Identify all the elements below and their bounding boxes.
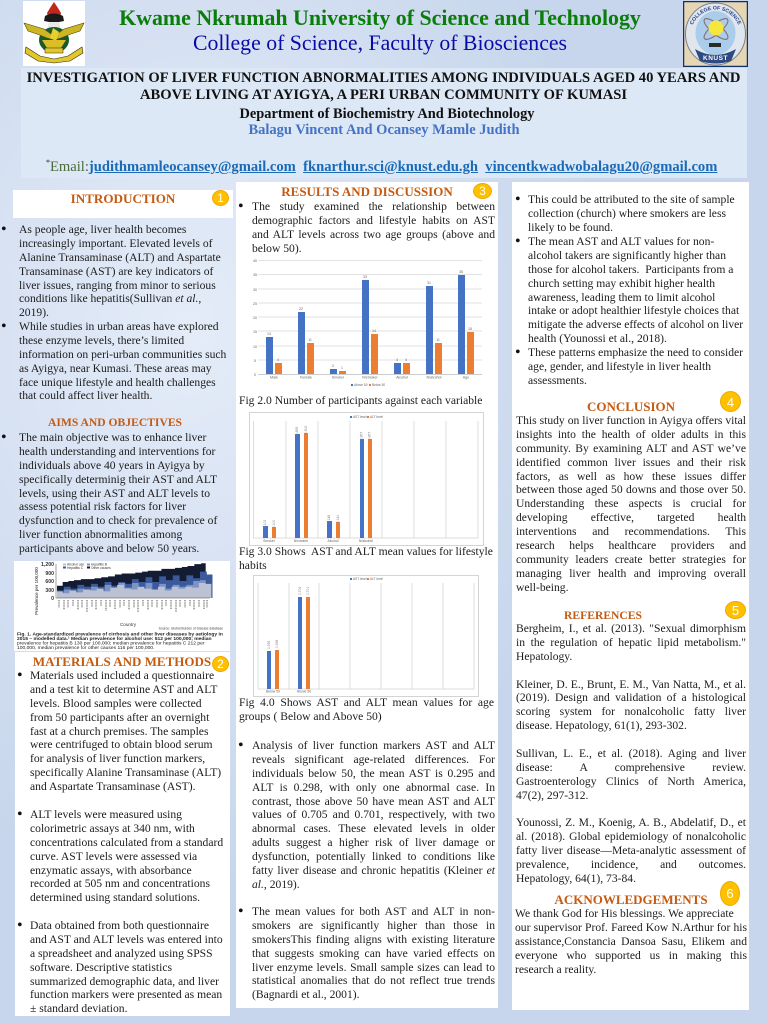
bar chart: participants per variable: Age — [463, 376, 469, 380]
bullets: methods: and a test kit to determine AST and ALT — [30, 683, 217, 696]
references list: 47(2), 297-312. — [516, 789, 588, 802]
bar chart: AST and ALT by age group: ALT level — [370, 577, 383, 581]
bullets: discussion continued: intake or adopt healthier lifestyle choices that — [528, 304, 739, 317]
bar chart: participants per variable: 5 — [254, 359, 256, 363]
bullets: introduction: While studies in urban areas have explored — [19, 320, 219, 333]
bullets: discussion continued: alcohol takers are significantly higher than — [528, 249, 726, 262]
bar chart: participants per variable: 1 — [341, 366, 343, 370]
bullets: discussion continued: awareness, leading them to limit alcohol — [528, 291, 715, 304]
badge 1: 1 — [217, 191, 224, 205]
bullet: analysis of markers — [238, 737, 496, 891]
bullets: discussion continued: The mean AST and ALT values for non- — [528, 235, 714, 248]
bar chart: AST and ALT by lifestyle: AST level — [353, 415, 367, 419]
bar chart: participants per variable: 4 — [405, 358, 407, 362]
references list: disease. Hepatology, 61(1), 293-302. — [516, 719, 687, 732]
bullet: smokers: smokers are significantly higher than those in — [252, 919, 495, 932]
bullet: aims: dysfunction and to check for prevalence of — [19, 514, 217, 527]
bullet: smokers: (Bagnardi et al., 2001). — [252, 988, 360, 1001]
bullets: introduction — [1, 221, 226, 402]
references list: Gastroenterology Clinics of North America, — [516, 775, 746, 788]
bar chart: AST and ALT by lifestyle: ALT level — [370, 415, 383, 419]
bar chart: AST and ALT by age group: 0.701 — [306, 587, 310, 595]
bullets: methods: and AST and ALT levels was entered into — [30, 933, 223, 946]
badge 6: 6 — [726, 886, 734, 901]
conclusion text: insights into the health of older adults in this — [516, 428, 746, 441]
bar chart: AST and ALT by lifestyle: 0.141 — [336, 515, 340, 523]
bullets: discussion continued: • — [515, 344, 521, 361]
bar chart: participants per variable: 20 — [253, 316, 257, 320]
bullet: aims: The main objective was to enhance liver — [19, 431, 206, 444]
bullet: study summary: demographic factors and lifestyle habits on AST — [252, 214, 495, 227]
bullet: aims: participants above and below 50 years. — [19, 542, 199, 555]
bar chart: AST and ALT by age group: 0.705 — [298, 587, 302, 595]
bar chart: participants per variable: Below 50 — [372, 383, 385, 387]
acknowledgements text: assistance,Constancia Dansoa Sasu, Elikem and — [515, 935, 747, 948]
bullets: discussion continued: those for alcohol takers. Participants from a — [528, 263, 733, 276]
heading: acknowledgements: ACKNOWLEDGEMENTS — [554, 892, 708, 907]
bar chart: AST and ALT by lifestyle — [249, 412, 484, 546]
bar chart: AST and ALT by lifestyle: 0.895 — [295, 427, 299, 435]
bar chart: participants per variable: Above 50 — [354, 383, 368, 387]
bullets: introduction: • — [1, 318, 7, 335]
bar chart: AST and ALT by lifestyle: 0.857 — [368, 432, 372, 440]
bullet: smokers: statistical anomalies that do not reflect true trends — [252, 974, 495, 987]
chart: prevalence of liver disease by country: Source: Global Burden of Disease database — [159, 626, 223, 630]
bullet: aims: liver function abnormalities among — [19, 528, 182, 541]
heading: materials and methods: MATERIALS AND METHODS — [33, 654, 211, 669]
badge 4 — [720, 391, 741, 412]
bar chart: participants per variable: 30 — [253, 288, 257, 292]
badge 4: 4 — [727, 395, 734, 410]
conclusion text: well-being. — [516, 581, 568, 594]
bullets: methods: determined using standard solutions. — [30, 891, 200, 904]
caption: figure 2: Fig 2.0 Number of participants against each variable — [239, 394, 482, 407]
bullets: methods: enzymatic assays, with absorbance — [30, 864, 192, 877]
caption: figure 3 — [239, 545, 493, 572]
panel: introduction and aims — [1, 190, 233, 555]
bullets: methods: curve. AST levels were assessed via — [30, 850, 197, 863]
bullets: methods: software. Descriptive statistics — [30, 961, 172, 974]
bullet: analysis of markers: adults suggest a higher risk of liver damage or — [252, 836, 495, 849]
chart: prevalence of liver disease by country: Alcohol use — [67, 562, 84, 566]
bullet: smokers — [238, 903, 495, 1001]
panel: title banner — [21, 68, 747, 178]
chart: prevalence of liver disease by country: 100,000, median prevalence for other causes 116 per 100,000. — [17, 645, 154, 651]
bar chart: participants per variable: 11 — [436, 338, 440, 342]
bullets: methods: specifically Alanine Transaminase (ALT) — [30, 766, 221, 779]
bullet: smokers: smokersThis finding aligns with existing literature — [252, 933, 495, 946]
bullets: introduction: conditions like hepatitis(Sullivan et al., — [19, 292, 201, 305]
bullet: analysis of markers: values of 0.705 and 0.701, respectively, with two — [252, 808, 495, 821]
badge 1 — [212, 190, 229, 206]
bullets: methods: • — [17, 667, 23, 684]
bullet: analysis of markers: contrast, those above 50 have mean AST and ALT — [252, 795, 495, 808]
chart: prevalence of liver disease by country: 0 — [51, 596, 54, 602]
bar chart: participants per variable: 15 — [253, 330, 257, 334]
bullet: analysis of markers: abnormal cases. These elevated levels in older — [252, 822, 495, 835]
references list: Bergheim, I., et al. (2013). "Sexual dimorphism — [516, 622, 746, 635]
conclusion text: developing effective, targeted health — [516, 511, 746, 524]
heading: conclusion: CONCLUSION — [587, 399, 675, 414]
bullet: smokers: The mean values for both AST and ALT in non- — [252, 905, 495, 918]
bullets: introduction: Transaminase (AST) are key indicators of — [19, 265, 213, 278]
contact emails: *Email:judithmamleocansey@gmail.com fknarthur.sci@knust.edu.gh vincentkwadwobalagu20@gmail.com — [46, 158, 717, 175]
references list: Kleiner, D. E., Brunt, E. M., Van Natta, M., et al. — [516, 678, 746, 691]
bullets: discussion continued: • — [515, 191, 521, 208]
bullet: analysis of markers: reveals significant age-related differences. For — [252, 753, 495, 766]
bullets: introduction: 2019). — [19, 306, 49, 319]
chart: prevalence of liver disease by country: prevalence for hepatitis B 130 per 100,000; median prevalence for hepatitis C 212 per — [17, 640, 205, 646]
bar chart: participants per variable: 2 — [332, 364, 334, 368]
caption: figure 3: Fig 3.0 Shows AST and ALT mean values for lifestyle — [239, 545, 493, 558]
bar chart: AST and ALT by age group: 0.295 — [267, 641, 271, 649]
bullet: aims: levels, using their AST and ALT levels to — [19, 487, 210, 500]
badge 5 — [725, 601, 746, 619]
bullets: discussion continued: health (Younossi et al., 2018). — [528, 332, 667, 345]
bar chart: participants per variable: 13 — [267, 332, 271, 336]
bullets: methods: Data obtained from both questionnaire — [30, 919, 209, 932]
bar chart: AST and ALT by lifestyle: N/smoker — [294, 539, 309, 543]
conclusion text: identified common liver issues and their risk — [516, 456, 746, 469]
bullet: analysis of markers: dysfunction, potentially linked to conditions like — [252, 850, 495, 863]
references list: Sullivan, L. E., et al. (2018). Aging and liver — [516, 747, 746, 760]
bar chart: participants per variable: 35 — [459, 270, 463, 274]
badge 6 — [720, 881, 740, 906]
bullet: aims: • — [1, 429, 7, 446]
heading: aims and objectives: AIMS AND OBJECTIVES — [48, 416, 182, 429]
conclusion text: factors, as well as how these issues differ — [516, 470, 746, 483]
badge 2: 2 — [217, 657, 224, 671]
bar chart: AST and ALT by age group: AST level — [353, 577, 367, 581]
bar chart: participants per variable: 14 — [372, 329, 376, 333]
bar chart: participants per variable: 25 — [253, 302, 257, 306]
bullets: methods: function markers were presented as mean — [30, 988, 222, 1001]
bullet: study summary: below 50). — [252, 242, 302, 255]
bullets: methods: summarized demographic data, and liver — [30, 975, 219, 988]
acknowledgements text — [515, 907, 747, 976]
bar chart: AST and ALT by age group — [253, 575, 479, 697]
chart: prevalence of liver disease by country: 900 — [45, 571, 54, 577]
heading: introduction: INTRODUCTION — [71, 191, 175, 206]
bar chart: participants per variable: 40 — [253, 259, 257, 263]
conclusion text: This study on liver function in Ayigya offers vital — [516, 414, 746, 427]
bullets: methods — [17, 667, 224, 1015]
acknowledgements text: research a reality. — [515, 963, 596, 976]
bullets: discussion continued: • — [515, 233, 521, 250]
references list: disease: A comprehensive review. — [516, 761, 746, 774]
acknowledgements text: everyone who supported us in making this — [515, 949, 747, 962]
bar chart: AST and ALT by lifestyle: Smoker — [263, 539, 276, 543]
references list: Hepatology, 64(1), 73-84. — [516, 872, 636, 885]
bar chart: AST and ALT by lifestyle: 0.102 — [263, 520, 267, 528]
badge 2 — [212, 656, 229, 672]
bullet: analysis of markers: Analysis of liver function markers AST and ALT — [252, 739, 495, 752]
bullets: methods: concentrations calculated from a standard — [30, 836, 223, 849]
acknowledgements text: our supervisor Prof. Fareed Kow N.Arthur for his — [515, 921, 747, 934]
bullets: introduction: • — [1, 221, 7, 238]
poster title: INVESTIGATION OF LIVER FUNCTION ABNORMALITIES AMONG INDIVIDUALS AGED 40 YEARS AND — [27, 70, 740, 86]
acknowledgements text: We thank God for His blessings. We appreciate — [515, 907, 734, 920]
heading: references: REFERENCES — [564, 609, 642, 622]
bullets: methods: • — [17, 806, 23, 823]
caption: figure 4: groups ( Below and Above 50) — [239, 710, 382, 723]
conclusion text — [516, 414, 746, 594]
references list: Younossi, Z. M., Koenig, A. B., Abdelatif, D., et — [516, 816, 746, 829]
bar chart: participants per variable — [253, 259, 482, 387]
bar chart: participants per variable: N/smoker — [362, 376, 378, 380]
department: Department of Biochemistry And Biotechnology — [240, 106, 534, 122]
bullets: discussion continued: likely to be found. — [528, 221, 613, 234]
bullets: discussion continued: This could be attributed to the site of sample — [528, 193, 735, 206]
bullets: discussion continued: church setting may exhibit higher health — [528, 277, 715, 290]
bullets: methods: fast at a church premises. The samples — [30, 725, 208, 738]
bullets: methods: and Aspartate Transaminase (AST). — [30, 780, 196, 793]
bullet: aims — [1, 429, 218, 555]
chart: prevalence of liver disease by country: 600 — [45, 579, 54, 585]
bar chart: participants per variable: 31 — [427, 281, 431, 285]
references list: fatty liver disease—Meta-analytic assessment of — [516, 844, 746, 857]
bar chart: AST and ALT by age group: Below 50 — [266, 690, 280, 694]
bullets: methods: a spreadsheet and analyzed using SPSS — [30, 947, 213, 960]
bullets: introduction: increasingly important. Elevated levels of — [19, 237, 212, 250]
bar chart: AST and ALT by lifestyle: N/alcohol — [359, 539, 373, 543]
bullets: discussion continued: age, gender, and lifestyle in liver health — [528, 360, 711, 373]
references list: (2019). Design and validation of a histological — [516, 691, 746, 704]
badge 3 — [473, 183, 492, 199]
bullets: introduction: information on peri-urban communities such — [19, 348, 226, 361]
chart: prevalence of liver disease by country: Hepatitis B — [91, 562, 108, 566]
bullets: discussion continued — [515, 191, 743, 387]
bullet: aims: specifically determinig their AST and ALT — [19, 473, 217, 486]
poster title: ABOVE LIVING AT AYIGYA, A PERI URBAN COMMUNITY OF KUMASI — [140, 87, 627, 103]
badge 3: 3 — [479, 184, 486, 198]
icon: College of Science logo: COLLEGE OF SCIENCE — [690, 6, 742, 25]
conclusion text: between those aged 50 downs and those over 50. — [516, 483, 746, 496]
intro heading box — [13, 190, 233, 218]
conclusion text: community. By examining ALT and AST we’ve — [516, 442, 746, 455]
bullet: analysis of markers: • — [238, 737, 244, 754]
bullet: study summary — [238, 198, 495, 255]
chart: prevalence of liver disease by country — [14, 561, 230, 651]
references list: al. (2018). Global epidemiology of nonalcoholic — [516, 830, 746, 843]
bar chart: AST and ALT by lifestyle: Alcohol — [327, 539, 339, 543]
panel: discussion, conclusion, references — [512, 182, 749, 1010]
bullet: aims: individuals above 40 years in Ayigya by — [19, 459, 205, 472]
bullet: study summary: and ALT levels across two age groups (above and — [252, 228, 495, 241]
chart: prevalence of liver disease by country: Fig. 1. Age-standardized prevalence of cirrhosis and other liver diseases by aetiology in — [17, 632, 223, 638]
bullet: aims: health understanding and interventions for — [19, 445, 215, 458]
bar chart: participants per variable: Male — [270, 376, 278, 380]
panel: materials and methods — [15, 652, 230, 1016]
chart: prevalence of liver disease by country: Hepatitis C — [67, 566, 84, 570]
heading: results and discussion: RESULTS AND DISCUSSION — [281, 184, 453, 199]
bullets: introduction: these enzyme levels, there’s limited — [19, 334, 184, 347]
bar chart: participants per variable: 35 — [253, 273, 257, 277]
bullets: discussion continued: collection (church) where smokers are less — [528, 207, 726, 220]
bullet: smokers: liver enzyme levels. Small sample sizes can lead to — [252, 961, 495, 974]
bullet: analysis of markers: fatty liver disease and chronic hepatitis (Kleiner et — [252, 864, 495, 877]
bullets: introduction: as Ayigya, near Kumasi. These areas may — [19, 362, 212, 375]
references list — [516, 622, 746, 885]
references list: prevalence, incidence, and outcomes. — [516, 858, 746, 871]
bullet: analysis of markers: ALT is 0.298, with only one abnormal case. In — [252, 781, 495, 794]
bar chart: AST and ALT by lifestyle: 0.857 — [360, 432, 364, 440]
bar chart: participants per variable: Smoker — [332, 376, 345, 380]
conclusion text: community leaders create better strategies for — [516, 553, 746, 566]
conclusion text: Understanding these aspects is crucial for — [516, 497, 746, 510]
chart: prevalence of liver disease by country: Other causes — [91, 566, 111, 570]
bullets: introduction: that could affect liver health. — [19, 389, 152, 402]
icon: College of Science logo: KNUST — [703, 55, 728, 62]
icon: College of Science logo — [683, 1, 748, 67]
bullet: study summary: • — [238, 198, 244, 215]
references list: scoring system for nonalcoholic fatty liver — [516, 705, 746, 718]
references list: in the regulation of hepatic lipid metabolism." — [516, 636, 746, 649]
chart: prevalence of liver disease by country: 300 — [45, 588, 54, 594]
chart: prevalence of liver disease by country: Prevalence per 100,000 — [34, 567, 39, 615]
authors: Balagu Vincent And Ocansey Mamle Judith — [248, 122, 520, 138]
university name: Kwame Nkrumah University of Science and Technology — [119, 5, 641, 30]
bullets: methods: were centrifuged to obtain blood serum — [30, 738, 213, 751]
conclusion text: research helps healthcare providers and — [516, 539, 746, 552]
bar chart: participants per variable: Alcohol — [396, 376, 408, 380]
bullet: study summary: The study examined the relationship between — [252, 200, 495, 213]
bar chart: participants per variable: 15 — [468, 327, 472, 331]
bullets: introduction: face unique lifestyle and health challenges — [19, 376, 216, 389]
bullet: analysis of markers: al., 2019). — [252, 878, 300, 891]
bullet: aims: assess potential risk factors for liver — [19, 500, 186, 513]
bullets: methods: • — [17, 917, 23, 934]
bullet: analysis of markers: individuals below 50, the mean AST is 0.295 and — [252, 767, 495, 780]
bar chart: AST and ALT by age group: 0.298 — [275, 640, 279, 648]
bullets: methods: from 50 participants after an overnight — [30, 711, 209, 724]
bullets: methods: Materials used included a questionnaire — [30, 669, 214, 682]
bar chart: participants per variable: Female — [300, 376, 312, 380]
bullets: discussion continued: mitigate the adverse effects of alcohol on liver — [528, 318, 743, 331]
bar chart: participants per variable: N/alcohol — [427, 376, 442, 380]
references list: Hepatology. — [516, 650, 572, 663]
bullets: introduction: liver issues, ranging from minor to serious — [19, 279, 216, 292]
bullets: discussion continued: assessments. — [528, 374, 587, 387]
caption: figure 4: Fig 4.0 Shows AST and ALT mean values for age — [239, 696, 494, 709]
chart: prevalence of liver disease by country: 1,200 — [41, 562, 54, 568]
caption: figure 3: habits — [239, 559, 267, 572]
bar chart: participants per variable: 22 — [299, 307, 303, 311]
poster title — [27, 70, 740, 103]
bullets: methods: for analysis of liver function markers, — [30, 752, 205, 765]
bar chart: AST and ALT by lifestyle: 0.100 — [272, 520, 276, 528]
chart: prevalence of liver disease by country: Country — [120, 622, 137, 627]
bullet: smokers: • — [238, 903, 244, 920]
bullets: discussion continued: These patterns emphasize the need to consider — [528, 346, 743, 359]
bullets: introduction: As people age, liver health becomes — [19, 223, 186, 236]
caption: figure 4 — [239, 696, 494, 723]
badge 5: 5 — [732, 603, 739, 618]
bar chart: participants per variable: 4 — [396, 358, 398, 362]
icon: KNUST crest logo — [23, 1, 85, 66]
bar chart: participants per variable: 33 — [363, 275, 367, 279]
bullets: methods: ALT levels were measured using — [30, 808, 182, 821]
bullets: methods: recorded at 505 nm and concentrations — [30, 877, 210, 890]
bullet: smokers: that suggests smoking can have varied effects on — [252, 947, 495, 960]
bullets: methods: colorimetric assays at 340 nm, with — [30, 822, 195, 835]
header: university names — [119, 5, 641, 55]
bar chart: participants per variable: 0 — [254, 373, 256, 377]
bar chart: AST and ALT by lifestyle: 0.902 — [304, 426, 308, 434]
panel: results and discussion — [236, 182, 498, 1008]
bar chart: AST and ALT by age group: Above 50 — [297, 690, 311, 694]
bar chart: participants per variable: 4 — [277, 358, 279, 362]
faculty name: College of Science, Faculty of Biosciences — [193, 31, 567, 55]
bullets: introduction: Alanine Transaminase (ALT) and Aspartate — [19, 251, 221, 264]
bullets: methods: ± standard deviation. — [30, 1002, 127, 1015]
bar chart: participants per variable: 10 — [253, 345, 257, 349]
conclusion text: managing liver health and improving overall — [516, 567, 746, 580]
bullets: methods: levels. Blood samples were collected — [30, 697, 202, 710]
conclusion text: interventions and recommendations. This — [516, 525, 746, 538]
bar chart: participants per variable: 11 — [308, 338, 312, 342]
chart: prevalence of liver disease by country: 2015 – modelled data.¹ Median prevalence for alcohol use: 512 per 100,000; median — [17, 636, 212, 642]
bar chart: AST and ALT by lifestyle: 0.148 — [327, 515, 331, 523]
